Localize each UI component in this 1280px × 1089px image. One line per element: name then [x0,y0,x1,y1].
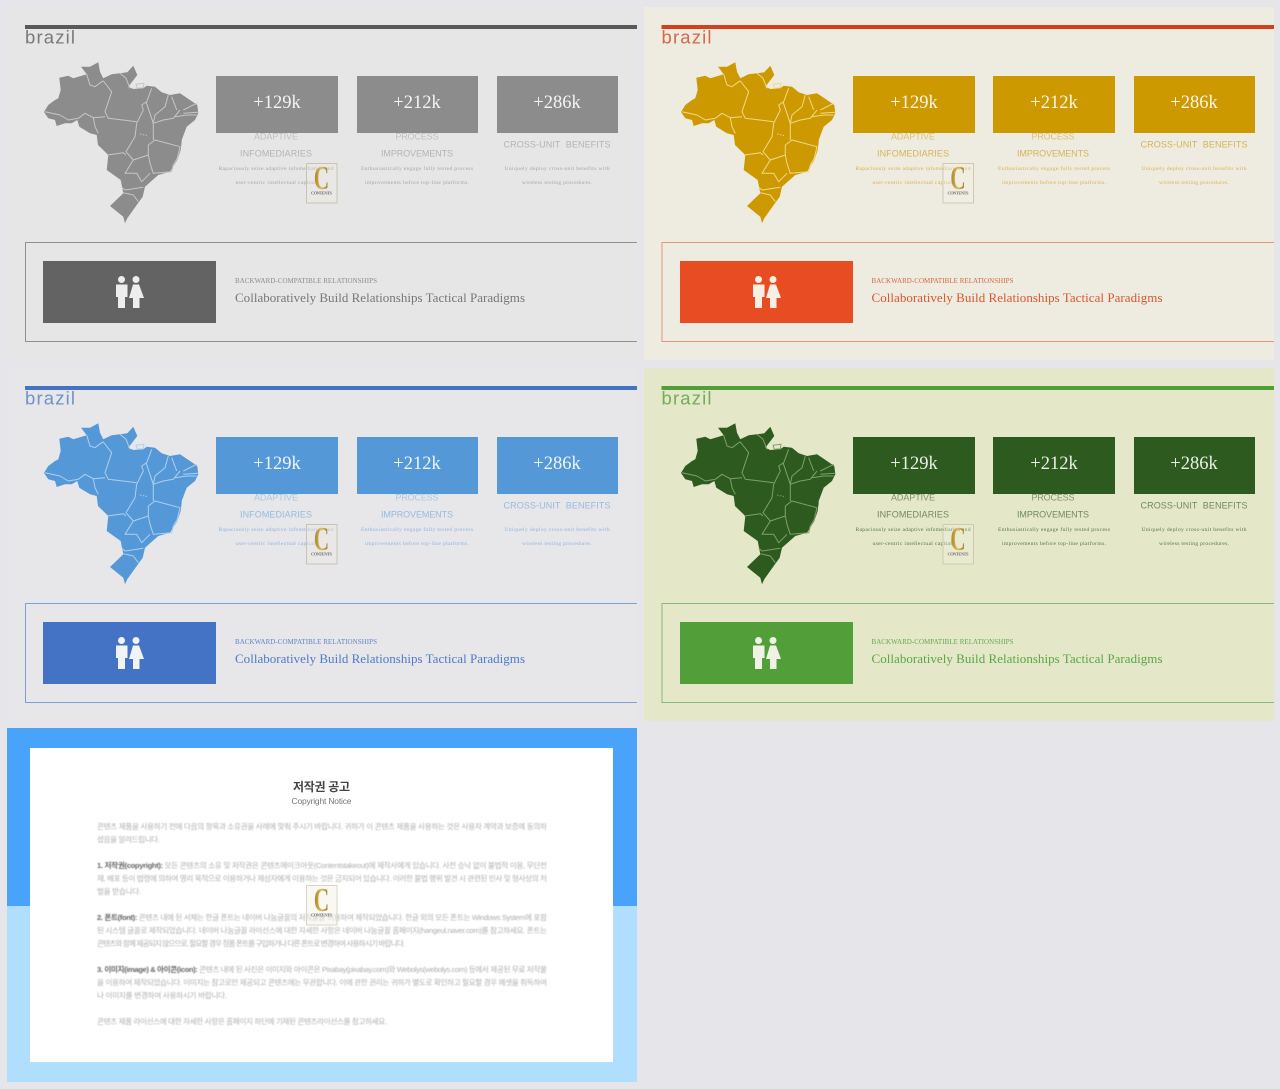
relationship callout: BACKWARD-COMPATIBLE RELATIONSHIPS [235,638,377,646]
stat: 129k: ADAPTIVE [254,132,298,142]
text block: license footer: 콘텐츠 제품 라이선스에 대한 자세한 사항은 홈페이지 하단에 기재된 콘텐츠라이선스를 참고하세요. [97,1016,387,1026]
stat: 286k [1134,437,1255,547]
stat: 212k: PROCESS [1032,132,1074,142]
stat: 129k: +129k [890,93,938,113]
stat: 129k: +129k [253,93,301,113]
stat: 212k: improvements before top-line platforms. [1002,179,1107,186]
top rule [662,386,1274,390]
text block: images and icons: 나 이미지를 변경하여 사용하시기 바랍니다. [97,990,227,1000]
heading: copyright notice: Copyright Notice [292,796,352,806]
heading: brazil: brazil [25,388,75,408]
relationship callout: BACKWARD-COMPATIBLE RELATIONSHIPS [872,638,1014,646]
stat: 129k: ADAPTIVE [254,492,298,502]
stat: 286k: Uniquely deploy cross-unit benefits with [504,526,610,533]
watermark [943,521,974,564]
stat: 212k: PROCESS [396,492,438,502]
stat: 129k: Rapaciously seize adaptive infomediaries and [856,526,971,533]
text block: copyright [97,860,547,896]
watermark [306,160,337,203]
panel: green brazil slide [644,368,1274,721]
stat: 286k: wireless testing procedures. [1159,541,1230,547]
top rule [662,25,1274,29]
stat: 212k: +212k [393,93,441,113]
stat: 129k: INFOMEDIARIES [240,148,312,158]
stat: 129k: +129k [890,454,938,474]
panel: gold brazil slide [644,7,1274,360]
stat: 129k: INFOMEDIARIES [877,148,949,158]
text block: images and icons [97,964,547,1000]
icon: people [753,637,781,669]
stat: 129k [853,76,975,186]
map of Brazil [681,62,835,223]
stat: 286k: CROSS-UNIT BENEFITS [1140,500,1248,510]
text block: font [97,912,547,948]
watermark [306,521,337,564]
stat: 286k: CROSS-UNIT BENEFITS [504,140,610,150]
stat: 129k: user-centric intellectual capital. [236,541,317,547]
text block: font: 된 시스템 글꼴로 제작되었습니다. 네이버 나눔글꼴 라이선스에 대한 자세한 사항은 네이버 나눔글꼴 홈페이지(hangeul.naver.com)를 참고하세요. 폰트는 [97,925,547,935]
text block: images and icons: 을 이용하여 제작되었습니다. 이미지는 참고로만 제공되고 콘텐츠에는 무관합니다. 이에 관한 권리는 귀하가 별도로 확인하고 필요할 경우 에셋을 취득하여 [97,977,547,987]
stat: 129k: ADAPTIVE [891,132,935,142]
stat: 286k [497,76,618,186]
text block: copyright: 재, 배포 등이 법령에 의하여 영리 목적으로 이용하거나 제삼자에게 이용하는 것은 금지되어 있습니다. 이러한 불법 행위 발견 시 관련된 민사 및 형사상의 처 [97,873,547,883]
stat: 286k: wireless testing procedures. [522,541,593,547]
watermark: C [950,160,966,197]
text block: font: 콘텐츠와 함께 제공되지 않으므로, 필요할 경우 정품 폰트를 구입하거나 다른 폰트로 변경하여 사용하시기 바랍니다. [97,938,405,948]
stat: 286k: Uniquely deploy cross-unit benefits with [1142,165,1247,172]
watermark: CONTENTS [311,190,332,196]
watermark: CONTENTS [311,552,332,556]
stat: 212k [993,437,1115,547]
stat: 129k: +129k [253,454,301,474]
stat: 212k: improvements before top-line platforms. [365,179,470,186]
watermark [306,882,337,925]
relationship callout [662,604,1274,702]
map of Brazil [44,423,198,584]
stat: 212k: IMPROVEMENTS [381,148,453,158]
text block: images and icons: 3. 이미지(image) & 아이콘(icon): 콘텐츠 내에 된 사진은 이미지와 아이콘은 Pixabay(pixabay.com)와 Webolys(webolys.com) 등에서 제공된 무료 저작물 [97,964,547,974]
text block: introduction: 셨음을 알려드립니다. [97,834,160,844]
relationship callout: BACKWARD-COMPATIBLE RELATIONSHIPS [235,277,377,285]
stat: 212k: IMPROVEMENTS [1017,148,1089,158]
stat: 212k: IMPROVEMENTS [381,510,453,520]
text block: copyright: 1. 저작권(copyright): 모든 콘텐츠의 소유 및 저작권은 콘텐츠메이크아웃(Contentstakeout)에 제작사에게 있습니다. 사전 승낙 없이 불법적 이용, 무단전 [97,860,547,870]
panel: gray brazil slide [7,7,637,360]
watermark: C [314,160,329,197]
stat: 212k: +212k [393,454,441,474]
stat: 286k [1134,76,1255,186]
stat: 286k: +286k [1170,454,1218,474]
stat: 212k [357,437,478,547]
stat: 286k: CROSS-UNIT BENEFITS [1140,140,1248,150]
stat: 129k: Rapaciously seize adaptive infomediaries and [218,165,334,172]
relationship callout: BACKWARD-COMPATIBLE RELATIONSHIPS [872,277,1014,285]
stat: 129k: Rapaciously seize adaptive infomediaries and [856,165,971,172]
stat: 129k: INFOMEDIARIES [877,510,949,520]
text block: introduction [97,821,547,844]
relationship callout [26,242,637,342]
stat: 212k: Enthusiastically engage fully tested process [361,165,473,172]
stat: 286k [497,437,618,547]
stat: 129k: Rapaciously seize adaptive infomediaries and [218,526,334,533]
stat: 129k: user-centric intellectual capital. [872,180,954,186]
stat: 212k: +212k [1030,454,1078,474]
icon: people [116,276,144,308]
stat: 129k [216,437,338,547]
panel: blue brazil slide [7,368,637,721]
stat: 212k: PROCESS [1032,492,1074,502]
stat: 212k: improvements before top-line platforms. [365,540,470,547]
watermark: C [314,521,329,558]
stat: 129k: INFOMEDIARIES [240,510,312,520]
stat: 212k: Enthusiastically engage fully tested process [998,165,1110,172]
panel: copyright notice [7,728,637,1082]
text block: font: 2. 폰트(font): 콘텐츠 내에 된 서체는 한글 폰트는 네이버 나눔글꼴의 저작물을 허용하여 제작되었습니다. 한글 외의 모든 폰트는 Windows System에 포함 [97,912,547,922]
stat: 129k: ADAPTIVE [891,492,935,502]
relationship callout: Collaboratively Build Relationships Tactical Paradigms [235,651,525,666]
heading: brazil: brazil [25,26,75,48]
heading: copyright notice: 저작권 공고 [293,779,350,794]
watermark: CONTENTS [311,912,332,918]
stat: 212k [357,76,478,186]
watermark: CONTENTS [948,552,969,556]
heading: brazil: brazil [662,388,712,408]
watermark [943,160,974,203]
watermark: C [314,882,329,919]
relationship callout [26,604,637,702]
stat: 129k [853,437,975,547]
stat: 286k: +286k [533,93,581,113]
stat: 286k: Uniquely deploy cross-unit benefits with [504,165,610,172]
relationship callout [662,242,1274,342]
heading: brazil: brazil [662,26,712,48]
map of Brazil [44,62,198,223]
relationship callout: Collaboratively Build Relationships Tactical Paradigms [872,290,1162,305]
stat: 286k: CROSS-UNIT BENEFITS [504,500,610,510]
stat: 212k: improvements before top-line platforms. [1002,540,1107,547]
text block: introduction: 콘텐츠 제품을 사용하기 전에 다음의 항목과 소유권을 사례에 맞춰 주시기 바랍니다. 귀하가 이 콘텐츠 제품을 사용하는 것은 사용자 계약과 보증에 동의하 [97,821,547,831]
stat: 129k [216,76,338,186]
relationship callout: Collaboratively Build Relationships Tactical Paradigms [235,290,525,305]
stat: 212k: IMPROVEMENTS [1017,510,1089,520]
stat: 286k: +286k [1170,93,1218,113]
heading: copyright notice [292,779,352,806]
stat: 286k: wireless testing procedures. [1159,180,1230,186]
stat: 212k: Enthusiastically engage fully tested process [361,526,473,533]
icon: people [753,276,781,308]
relationship callout: Collaboratively Build Relationships Tactical Paradigms [872,651,1162,666]
stat: 286k: +286k [533,454,581,474]
stat: 286k: wireless testing procedures. [522,180,593,186]
stat: 212k: PROCESS [396,132,438,142]
watermark: CONTENTS [948,190,969,196]
stat: 129k: user-centric intellectual capital. [872,541,954,547]
icon: people [116,637,144,669]
top rule [25,386,637,390]
stat: 212k: Enthusiastically engage fully tested process [998,526,1110,533]
watermark: C [950,521,966,558]
stat: 286k: Uniquely deploy cross-unit benefits with [1142,526,1247,533]
top rule [25,25,637,29]
stat: 212k [993,76,1115,186]
map of Brazil [681,423,835,584]
stat: 129k: user-centric intellectual capital. [236,180,317,186]
stat: 212k: +212k [1030,93,1078,113]
text block: copyright: 벌을 받습니다. [97,886,141,896]
